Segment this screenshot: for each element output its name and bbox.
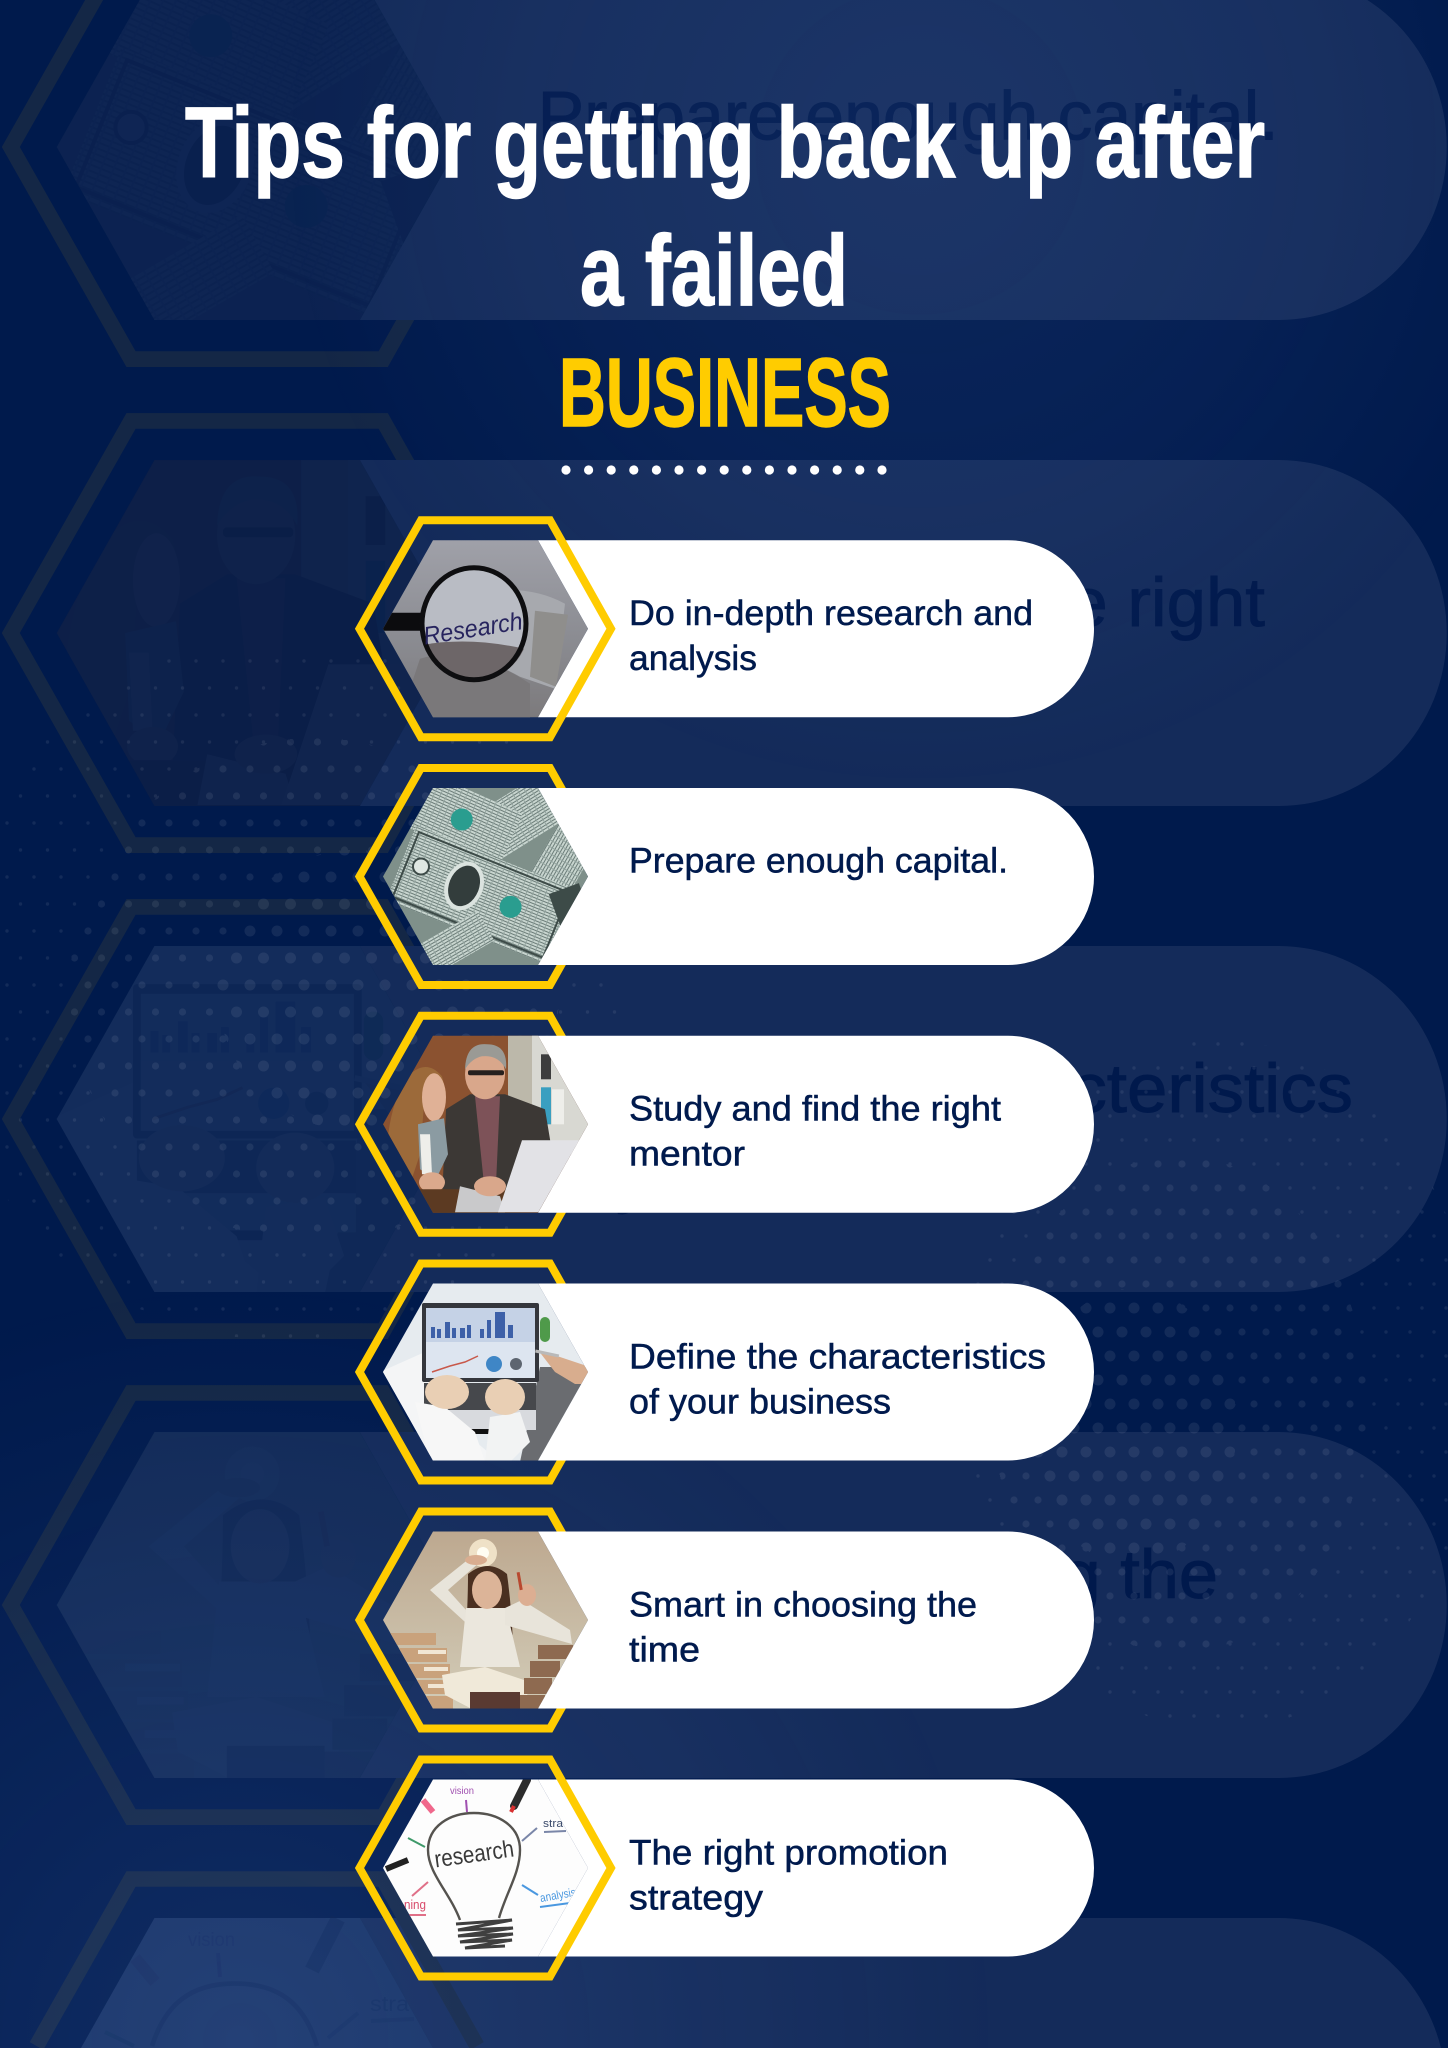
pill	[538, 788, 1094, 965]
tip text	[629, 1833, 948, 1917]
tip text: The right promotion	[629, 1833, 948, 1872]
ghost row: promotion: stra	[370, 1993, 409, 2016]
bulb word: research	[433, 1836, 516, 1873]
title line 2: a failed	[580, 215, 848, 327]
tip text: analysis	[629, 639, 757, 678]
tip 2: capital	[360, 754, 1094, 986]
tip text: time	[629, 1630, 700, 1669]
pill	[538, 1284, 1094, 1460]
photo: dollar bills	[380, 754, 606, 986]
lens word: Research	[421, 607, 525, 651]
hexagon frame	[360, 520, 611, 737]
idea labels: stra	[543, 1818, 564, 1830]
background glow bottom	[0, 1200, 1448, 2048]
pill	[538, 1532, 1094, 1708]
hexagon frame	[360, 768, 611, 985]
ghost row: characteristics	[11, 907, 1447, 1331]
pill	[538, 1036, 1094, 1213]
photo: magnifying glass	[380, 539, 590, 719]
photo: mentor and student	[380, 1034, 590, 1219]
background glow top	[0, 0, 1448, 1000]
photo: woman with idea and books	[380, 1530, 590, 1711]
tip 1: research	[360, 520, 1094, 737]
tip 4: characteristics	[360, 1264, 1094, 1480]
pill	[538, 1780, 1094, 1956]
pill	[538, 540, 1094, 717]
photo: light bulb sketch	[380, 1778, 590, 1958]
halftone dots right	[960, 1040, 1448, 1730]
tip 6: promotion	[360, 1760, 1094, 1976]
ghost row: time	[11, 1393, 1447, 1817]
idea labels: vision	[450, 1786, 474, 1797]
ghost row: capital	[11, 0, 1447, 360]
hexagon frame	[360, 1016, 611, 1233]
tip text	[629, 1090, 1001, 1174]
tip 5: time	[360, 1512, 1094, 1728]
ghost row: promotion: vision	[188, 1929, 235, 1951]
tip text	[629, 1585, 977, 1669]
dotted divider	[561, 465, 887, 475]
tip text: Do in-depth research and	[629, 594, 1033, 633]
tip text: strategy	[629, 1878, 764, 1917]
hexagon frame	[360, 1264, 611, 1480]
hexagon frame	[360, 1760, 611, 1976]
title highlight: BUSINESS	[559, 338, 891, 447]
title	[185, 87, 1265, 447]
tip text: Define the characteristics	[629, 1337, 1046, 1376]
hexagon frame	[360, 1512, 611, 1728]
tip text: Smart in choosing the	[629, 1585, 977, 1624]
tip text: Study and find the right	[629, 1090, 1001, 1129]
tip text: of your business	[629, 1382, 891, 1421]
idea labels	[404, 1786, 577, 1912]
tip 3: mentor	[360, 1016, 1094, 1233]
tip text	[629, 1337, 1046, 1421]
photo: laptop with charts	[380, 1282, 590, 1462]
tip text: Prepare enough capital.	[629, 842, 1008, 881]
idea labels: ning	[404, 1897, 426, 1912]
ghost photo softening	[57, 0, 458, 2048]
idea labels: analysis	[539, 1885, 577, 1905]
ghost row: mentor	[11, 421, 1447, 845]
halftone dots left	[0, 640, 620, 1340]
tip text	[629, 594, 1033, 678]
ghost row: promotion	[36, 1879, 1441, 2048]
tip text: mentor	[629, 1135, 745, 1174]
